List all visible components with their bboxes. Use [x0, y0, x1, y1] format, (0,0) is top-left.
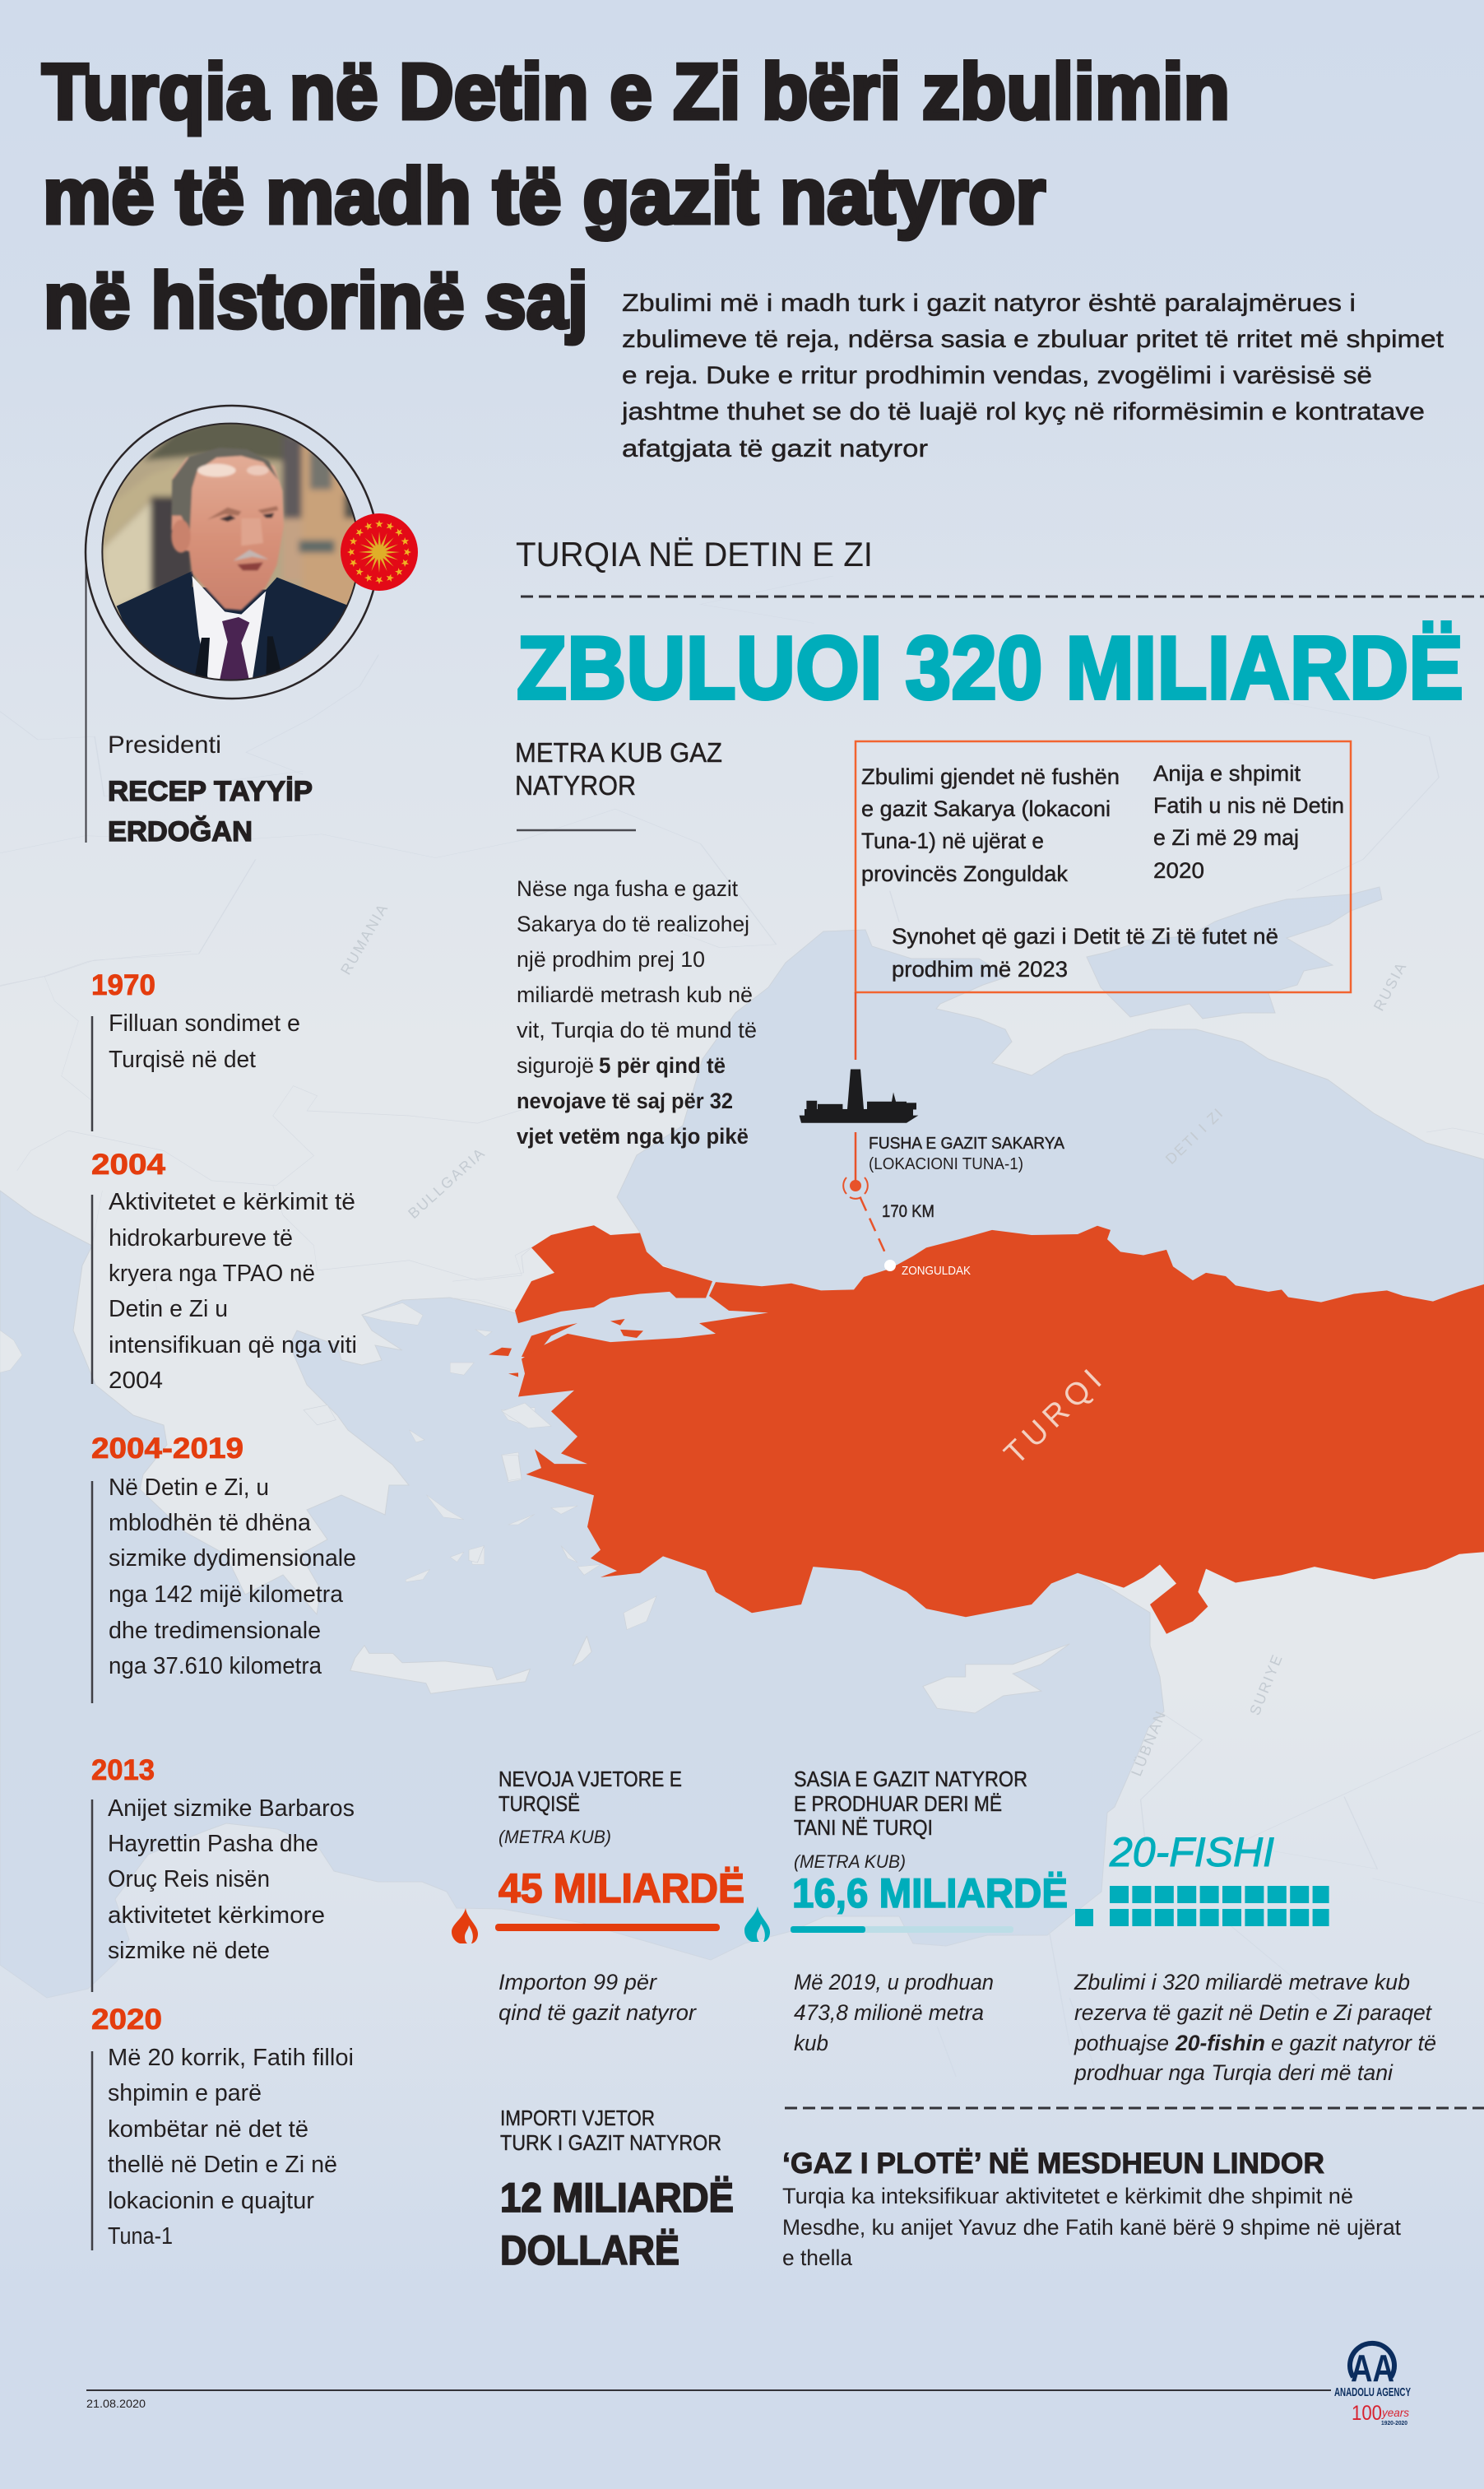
timeline: 2004-2019: nga 37.610 kilometra: [109, 1653, 322, 1679]
timeline: 2013: Anijet sizmike Barbaros: [108, 1795, 355, 1822]
timeline: 2004: hidrokarbureve të: [109, 1225, 293, 1251]
timeline: 2004: kryera nga TPAO në: [109, 1261, 315, 1287]
timeline: 2004: Aktivitetet e kërkimit të: [109, 1189, 355, 1215]
callout box: Anija e shpimit: [1153, 761, 1301, 786]
paragraph: Sakarya production: vit, Turqia do të mund të: [517, 1018, 757, 1043]
intro paragraph: [621, 290, 1445, 462]
sea: Azov: [1087, 887, 1382, 1019]
map labels: DETI I ZI: [1162, 1104, 1227, 1168]
unit label: [515, 737, 722, 830]
stat: annual need: (METRA KUB): [499, 1827, 611, 1847]
callout box: prodhim më 2023: [892, 957, 1068, 982]
distance line to Zonguldak: ZONGULDAK: [902, 1264, 971, 1278]
stat: produced so far: 16,6 MILIARDË: [792, 1870, 1068, 1916]
stat: produced so far: Më 2019, u prodhuan: [794, 1970, 994, 1994]
stat: annual need: NEVOJA VJETORE E: [499, 1767, 682, 1791]
section: Eastern Mediterranean: Turqia ka inteksifikuar aktivitetet e kërkimit dhe shpimit në: [782, 2184, 1353, 2208]
title: më të madh të gazit natyror: [43, 152, 1046, 240]
paragraph: Sakarya production: nevojave të saj për 32: [517, 1089, 733, 1113]
timeline: 2004-2019: dhe tredimensionale: [109, 1618, 321, 1644]
stat: annual import: IMPORTI VJETOR: [500, 2106, 655, 2130]
paragraph: Sakarya production: sigurojë: [517, 1053, 594, 1078]
callout box: Fatih u nis në Detin: [1153, 793, 1344, 818]
stat: produced so far: SASIA E GAZIT NATYROR: [794, 1767, 1027, 1791]
stat: 20-fold: 20-fishin: [1175, 2031, 1265, 2055]
icon: red flame: [452, 1908, 478, 1943]
stat: annual import: DOLLARË: [500, 2227, 679, 2273]
callout box: Tuna-1) në ujërat e: [861, 829, 1044, 853]
icon: presidential emblem: [341, 513, 418, 591]
timeline: 2004-2019: nga 142 mijë kilometra: [109, 1581, 344, 1608]
timeline: 2004-2019: mblodhën të dhëna: [109, 1510, 312, 1536]
stat: 20-fold: rezerva të gazit në Detin e Zi paraqet: [1074, 2000, 1432, 2025]
intro paragraph: zbulimeve të reja, ndërsa sasia e zbuluar pritet të rritet më shpimet: [622, 326, 1445, 353]
president name: Presidenti: [108, 731, 221, 759]
intro paragraph: afatgjata të gazit natyror: [622, 435, 928, 462]
logo: Anadolu Agency: [1334, 2343, 1411, 2426]
timeline: 1970: Turqisë në det: [109, 1047, 256, 1073]
connector line from callout to ship: [855, 992, 856, 1060]
stat: annual need: [452, 1767, 744, 2025]
timeline: 2013: sizmike në dete: [108, 1938, 270, 1964]
fade overlays: [0, 0, 1484, 1053]
paragraph: Sakarya production: miliardë metrash kub në: [517, 982, 753, 1007]
paragraph: Sakarya production: Nëse nga fusha e gazit: [517, 876, 738, 901]
label: gas field: [869, 1135, 1065, 1173]
title: Turqia në Detin e Zi bëri zbulimin: [42, 48, 1230, 136]
president name: ERDOĞAN: [108, 816, 253, 847]
sea: Marmara basin under Turkey: [512, 1281, 781, 1391]
timeline: 2004-2019: [91, 1433, 356, 1703]
callout box: 2020: [1153, 858, 1204, 883]
intro paragraph: Zbulimi më i madh turk i gazit natyror është paralajmërues i: [622, 290, 1356, 317]
map labels: LÜBNAN: [1128, 1707, 1170, 1778]
portrait of the president: [86, 406, 378, 843]
callout box: e gazit Sakarya (lokaconi: [861, 796, 1111, 821]
stat: produced so far: 473,8 milionë metra: [794, 2000, 984, 2025]
stat: produced so far: kub: [794, 2031, 828, 2055]
timeline: 2013: aktivitetet kërkimore: [108, 1902, 325, 1929]
timeline: 1970: Filluan sondimet e: [109, 1010, 300, 1037]
map labels: [337, 900, 1410, 1778]
section: Eastern Mediterranean: Mesdhe, ku anijet Yavuz dhe Fatih kanë bërë 9 shpime në ujërat: [782, 2215, 1401, 2240]
stat: 20-fold: prodhuar nga Turqia deri më tani: [1074, 2060, 1394, 2085]
timeline: 2004: Detin e Zi u: [109, 1296, 228, 1322]
islands: [0, 1303, 1069, 1713]
timeline: 2020: Tuna-1: [108, 2223, 173, 2250]
timeline: 2004-2019: sizmike dydimensionale: [109, 1545, 356, 1572]
footer rule and date: 21.08.2020: [86, 2397, 146, 2410]
icon: drilling ship: [800, 1069, 918, 1123]
paragraph: Sakarya production: [517, 876, 757, 1149]
callout box: e Zi më 29 maj: [1153, 825, 1299, 850]
president name: [108, 731, 313, 847]
map labels: RUSIA: [1370, 959, 1410, 1014]
paragraph: Sakarya production: 5 për qind të: [599, 1053, 726, 1078]
stat: annual import: TURK I GAZIT NATYROR: [500, 2130, 721, 2155]
label: gas field: FUSHA E GAZIT SAKARYA: [869, 1135, 1065, 1153]
stat: annual need: TURQISË: [499, 1791, 580, 1816]
logo: Anadolu Agency: ANADOLU AGENCY: [1334, 2385, 1411, 2399]
icon grid: twenty units: [1075, 1886, 1329, 1926]
timeline: 2013: 2013: [91, 1754, 155, 1786]
logo: Anadolu Agency: AA: [1351, 2347, 1394, 2389]
map labels: BULLGARIA: [405, 1144, 489, 1222]
sea: Mediterranean and Aegean: [0, 1191, 1164, 1998]
timeline: 2004: 2004: [109, 1368, 163, 1394]
section: Eastern Mediterranean: [782, 2108, 1484, 2270]
logo: Anadolu Agency: 1920-2020: [1381, 2421, 1407, 2426]
intro paragraph: jashtme thuhet se do të luajë rol kyç në riformësimin e kontratave: [621, 398, 1425, 425]
map labels: SURIYE: [1246, 1651, 1286, 1717]
sea: Black Sea: [617, 930, 1484, 1333]
timeline: 2020: thellë në Detin e Zi në: [108, 2152, 337, 2178]
timeline: 2013: Hayrettin Pasha dhe: [108, 1831, 318, 1857]
map: Turkey: [489, 1225, 1484, 1634]
timeline: 2020: [91, 2004, 354, 2250]
timeline: 2020: shpimin e parë: [108, 2080, 262, 2106]
callout box: provincës Zonguldak: [861, 861, 1068, 886]
stat: 20-fold: e gazit natyror të: [1271, 2031, 1436, 2055]
label: gas field: (LOKACIONI TUNA-1): [869, 1155, 1023, 1173]
country borders: [0, 576, 1484, 2077]
distance line to Zonguldak: 170 KM: [882, 1202, 934, 1221]
stat: 20-fold: 20-FISHI: [1109, 1829, 1274, 1875]
unit label: METRA KUB GAZ: [515, 737, 722, 768]
timeline: 2004-2019: Në Detin e Zi, u: [109, 1474, 269, 1501]
stat: produced so far: (METRA KUB): [794, 1851, 906, 1872]
timeline: 2004: intensifikuan që nga viti: [109, 1332, 357, 1358]
stat: annual import: [500, 2106, 734, 2273]
callout box: Zbulimi gjendet në fushën: [861, 764, 1120, 789]
unit label: NATYROR: [515, 770, 636, 801]
timeline: 1970: 1970: [91, 969, 155, 1001]
stat: produced so far: [744, 1767, 1068, 2055]
stat: annual need: qind të gazit natyror: [499, 2000, 697, 2025]
distance line to Zonguldak: [860, 1198, 971, 1278]
paragraph: Sakarya production: Sakarya do të realizohej: [517, 912, 749, 936]
map labels: RUMANIA: [337, 900, 392, 977]
callout box: [856, 741, 1351, 992]
intro paragraph: e reja. Duke e rritur prodhimin vendas, zvogëlimi i varësisë së: [622, 362, 1372, 389]
marker: Sakarya gas field: [843, 1132, 868, 1199]
timeline: 2004: [91, 1149, 357, 1394]
icon: teal flame: [744, 1906, 770, 1942]
stat: produced so far: E PRODHUAR DERI MË: [794, 1791, 1002, 1816]
title: në historinë saj: [44, 257, 588, 345]
label: Turkey: TURQI: [998, 1359, 1112, 1471]
stat: annual need: 45 MILIARDË: [499, 1865, 744, 1911]
subheading: TURQIA NË DETIN E ZI: [516, 535, 873, 573]
title: [42, 48, 1230, 345]
timeline: 2013: Oruç Reis nisën: [108, 1866, 270, 1892]
stat: 20-fold: Zbulimi i 320 miliardë metrave kub: [1074, 1970, 1410, 1994]
timeline: 2004: 2004: [91, 1149, 166, 1181]
section: Eastern Mediterranean: ‘GAZ I PLOTË’ NË MESDHEUN LINDOR: [782, 2148, 1324, 2180]
timeline: 2013: [91, 1754, 355, 1992]
timeline: 1970: [91, 969, 300, 1131]
timeline: 2020: 2020: [91, 2004, 162, 2036]
paragraph: Sakarya production: një prodhim prej 10: [517, 947, 705, 972]
timeline: 2020: lokacionin e quajtur: [108, 2188, 314, 2214]
stat: annual import: 12 MILIARDË: [500, 2175, 734, 2221]
stat: produced so far: TANI NË TURQI: [794, 1815, 933, 1840]
timeline: 2004-2019: 2004-2019: [91, 1433, 243, 1465]
timeline: 2020: Më 20 korrik, Fatih filloi: [108, 2045, 354, 2071]
section: Eastern Mediterranean: e thella: [782, 2245, 853, 2270]
timeline: 2020: kombëtar në det të: [108, 2116, 308, 2143]
stat: 20-fold: [1074, 1829, 1436, 2085]
president name: RECEP TAYYİP: [108, 776, 313, 807]
callout box: Synohet që gazi i Detit të Zi të futet në: [892, 924, 1278, 949]
logo: Anadolu Agency: years: [1381, 2406, 1409, 2419]
stat: annual need: Importon 99 për: [499, 1970, 657, 1994]
stat: 20-fold: pothuajse: [1074, 2031, 1169, 2055]
paragraph: Sakarya production: vjet vetëm nga kjo pikë: [517, 1124, 749, 1149]
logo: Anadolu Agency: 100: [1352, 2402, 1382, 2425]
